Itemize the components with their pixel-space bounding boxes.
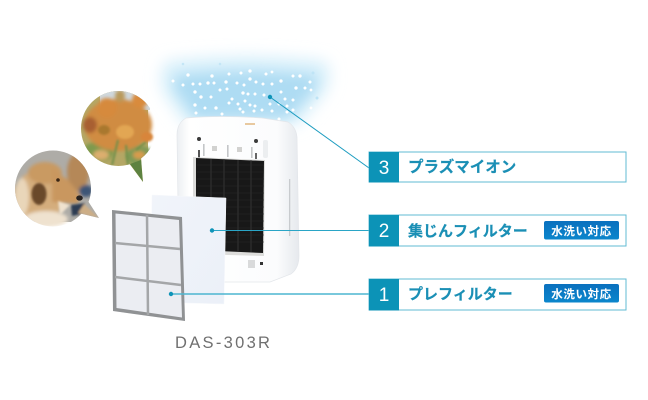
badge: washable: 水洗い対応	[551, 224, 612, 238]
plasma ion cloud	[161, 57, 329, 124]
number 2	[369, 215, 399, 246]
speech bubble photo: pollen	[78, 88, 154, 184]
label text 2: 集じんフィルター	[408, 222, 528, 240]
grey pre-filter	[112, 210, 185, 321]
leader line 1: pre-filter	[169, 292, 369, 296]
unit body	[177, 116, 299, 282]
control strip	[245, 123, 255, 125]
lower hardware	[248, 260, 263, 268]
number 1	[369, 279, 399, 310]
badge: washable: 水洗い対応	[551, 287, 612, 301]
black filter	[193, 157, 265, 256]
speech bubble photo: dog	[15, 150, 99, 226]
label text 1: プレフィルター	[408, 286, 513, 303]
leader line 3: plasma ion	[268, 95, 369, 168]
label 1: pre-filter	[369, 279, 626, 310]
label 3: plasma ion	[369, 152, 626, 182]
label text 3: プラズマイオン	[408, 157, 516, 176]
leader line 2: dust filter	[210, 228, 369, 233]
model name: DAS-303R	[175, 334, 272, 352]
number 2: 2	[379, 221, 389, 242]
white dust filter	[150, 195, 226, 304]
air purifier unit	[177, 116, 299, 282]
label 2: dust filter	[369, 215, 626, 246]
number 3	[369, 152, 399, 182]
side slot	[289, 179, 290, 236]
badge: washable	[544, 284, 619, 302]
number 3: 3	[379, 158, 389, 179]
number 1: 1	[379, 285, 389, 306]
upper panel details	[197, 137, 268, 159]
badge: washable	[544, 221, 619, 240]
